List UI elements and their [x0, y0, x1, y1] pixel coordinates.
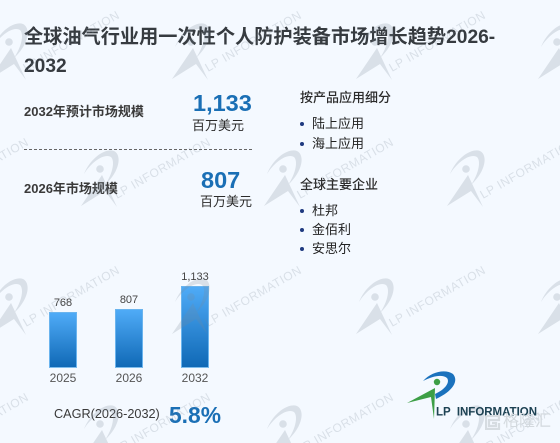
value: 2026 market size: 807	[201, 167, 240, 193]
value: 2032 market size	[192, 90, 252, 133]
label: 2032 market size: 2032年预计市场规模	[24, 104, 144, 119]
list: companies: 安思尔	[312, 241, 351, 256]
list: applications: 陆上应用	[312, 116, 364, 131]
logo: LP Information	[407, 371, 537, 419]
value: 2032 market size: 1,133	[193, 90, 252, 116]
bar: 2026: 2026	[116, 371, 142, 385]
heading: by product application: 按产品应用细分	[300, 90, 391, 105]
title: 2032	[24, 56, 67, 77]
value: 2026 market size	[200, 167, 252, 209]
heading: key global companies: 全球主要企业	[300, 177, 378, 192]
label: 2026 market size: 2026年市场规模	[24, 181, 118, 196]
bar: 2025: 2025	[50, 371, 76, 385]
title	[24, 26, 495, 77]
value: 2032 market size: 百万美元	[192, 118, 244, 133]
bar chart	[49, 271, 209, 385]
bar: 2025: 768	[54, 297, 72, 309]
value: 2026 market size: 百万美元	[200, 194, 252, 209]
logo: LP Information: LP INFORMATION	[436, 406, 537, 418]
bar: 2026	[115, 294, 143, 385]
bar: 2032: 2032	[182, 371, 208, 385]
bar: 2025	[49, 297, 77, 385]
bar: 2026: 807	[120, 294, 138, 306]
list: companies: 杜邦	[312, 203, 338, 218]
CAGR label: CAGR(2026-2032)	[54, 407, 160, 421]
bar: 2032	[181, 271, 209, 385]
CAGR value: 5.8%	[169, 402, 221, 428]
list: applications	[300, 116, 364, 151]
list: companies	[300, 203, 351, 256]
list: applications: 海上应用	[312, 136, 364, 151]
title: 全球油气行业用一次性个人防护装备市场增长趋势2026-	[24, 27, 495, 48]
watermark: Gelonghui badge	[485, 412, 551, 430]
watermark: Gelonghui badge: 格隆汇	[503, 413, 551, 430]
bar: 2032: 1,133	[181, 271, 209, 283]
list: companies: 金佰利	[312, 222, 351, 237]
